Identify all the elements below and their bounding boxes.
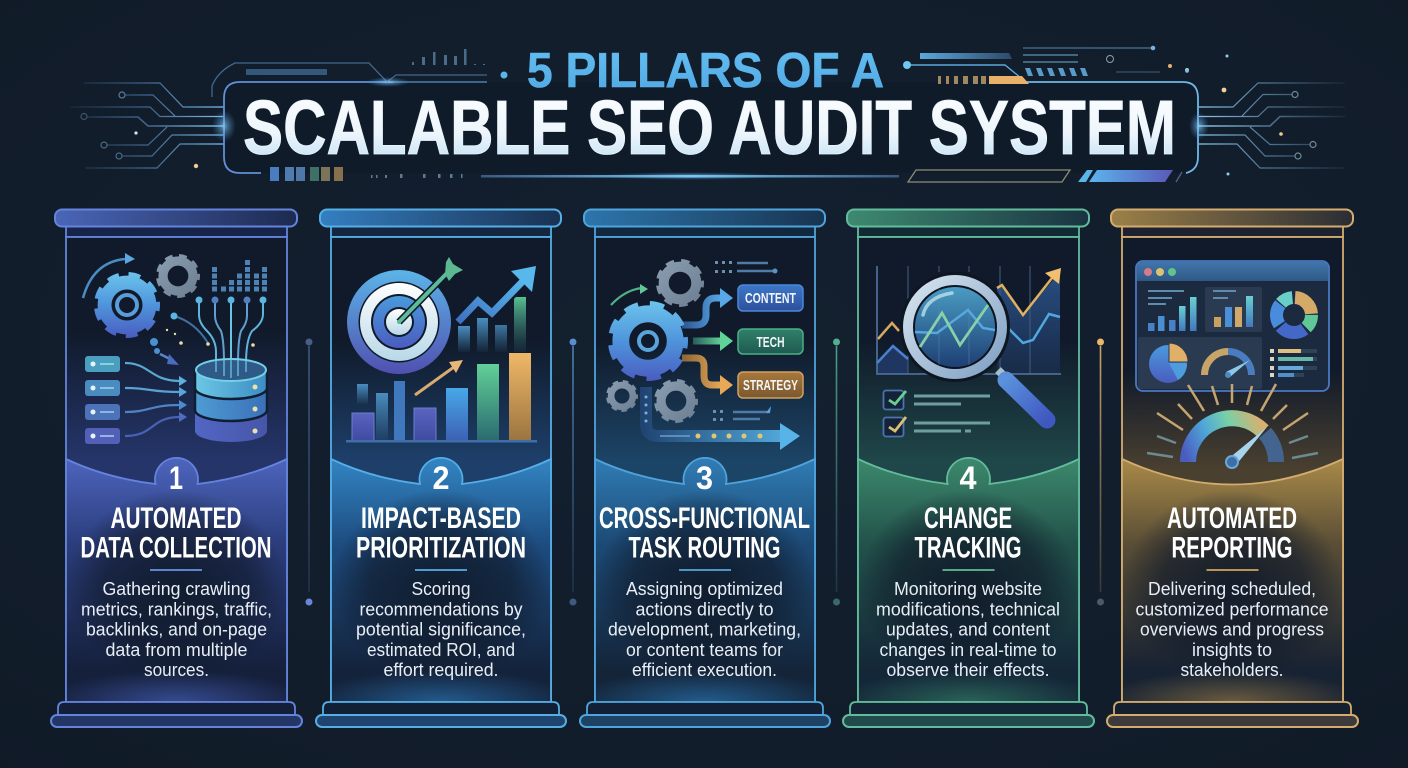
speedometer rays	[1147, 384, 1318, 458]
icon: dashboard and gauge	[1136, 261, 1329, 468]
pillar 1 frame	[51, 210, 302, 727]
pillar 5	[1107, 210, 1358, 727]
pillar 3 description: or content teams for	[626, 640, 783, 660]
pillar 1 heading	[80, 502, 272, 564]
pillar 4 heading	[914, 502, 1022, 564]
pillar 2	[316, 210, 566, 727]
pillar 1 heading: DATA COLLECTION	[80, 532, 272, 564]
pillar 3 heading: TASK ROUTING	[628, 532, 780, 564]
pillar 4 heading: CHANGE	[924, 502, 1012, 535]
pillar 4 description: changes in real-time to	[880, 640, 1056, 660]
pillar 5 description: customized performance	[1136, 599, 1328, 619]
pillar 1 description: sources.	[144, 660, 209, 680]
pillar 5 description: stakeholders.	[1180, 660, 1284, 680]
category chips	[738, 285, 803, 398]
pillar 3	[580, 210, 830, 727]
category chips: STRATEGY	[743, 377, 798, 394]
pillar 2 description: estimated ROI, and	[367, 640, 515, 660]
header decoration bottom	[270, 167, 1182, 182]
number badge 2: 2	[432, 460, 450, 496]
header decoration top right	[920, 46, 1189, 84]
pillar 5 heading: AUTOMATED	[1167, 502, 1297, 535]
title frame	[212, 61, 1209, 180]
pillar 1 heading: AUTOMATED	[110, 502, 242, 535]
number badge 4: 4	[960, 460, 977, 496]
pillar 4 heading: TRACKING	[914, 532, 1022, 564]
icon: data collection	[83, 253, 267, 444]
pillar 5 description	[1136, 579, 1328, 680]
icon: magnifier over chart	[877, 266, 1061, 436]
pillar 2 heading: PRIORITIZATION	[356, 532, 526, 564]
pillar 2 description: effort required.	[384, 660, 498, 680]
title line 1: 5 PILLARS OF A	[527, 44, 884, 98]
dashboard window	[1136, 261, 1329, 391]
pillar 1	[51, 210, 302, 727]
pillar 4	[843, 210, 1094, 727]
pillar 2 frame	[316, 210, 566, 727]
pillar 1 description: Gathering crawling	[102, 579, 250, 599]
connector line between pillars 2 and 3	[570, 338, 576, 606]
category chips: TECH	[756, 334, 784, 351]
pillar 3 description: development, marketing,	[608, 620, 801, 640]
pillar 2 heading: IMPACT-BASED	[361, 502, 521, 535]
pillar 1 description	[81, 579, 272, 680]
pillar 1 description: backlinks, and on-page	[86, 620, 267, 640]
pillar 3 heading: CROSS-FUNCTIONAL	[599, 502, 810, 535]
pillar 4 frame	[843, 210, 1094, 727]
category chips: CONTENT	[745, 290, 796, 307]
number badge 3: 3	[696, 460, 713, 496]
speedometer	[1188, 418, 1276, 468]
pillar 2 description: potential significance,	[356, 620, 526, 640]
pillar 3 description: actions directly to	[636, 599, 774, 619]
pillar 5 description: insights to	[1192, 640, 1272, 660]
number badge 1: 1	[169, 460, 183, 496]
pillar 4 description: updates, and content	[886, 620, 1050, 640]
pillar 5 heading: REPORTING	[1172, 532, 1292, 564]
pillar 2 description	[356, 579, 526, 680]
pillar 5 description: Delivering scheduled,	[1148, 579, 1316, 599]
pillar 3 description: efficient execution.	[632, 660, 777, 680]
pillar 4 description: Monitoring website	[894, 579, 1042, 599]
pillar 4 description: observe their effects.	[886, 660, 1050, 680]
right circuit traces	[1185, 54, 1345, 176]
pillar 5 description: overviews and progress	[1140, 620, 1324, 640]
pillar 1 description: metrics, rankings, traffic,	[81, 599, 272, 619]
pillar 3 frame	[580, 210, 830, 727]
pillar 1 description: data from multiple	[106, 640, 248, 660]
title line 2: SCALABLE SEO AUDIT SYSTEM	[243, 85, 1176, 171]
pillar 4 description	[876, 579, 1060, 680]
pillar 2 heading	[356, 502, 526, 564]
left circuit traces	[70, 83, 224, 168]
pillar 3 description	[608, 579, 801, 680]
header decoration top left	[246, 49, 485, 75]
icon: target and growth charts	[346, 257, 537, 442]
pillar 3 description: Assigning optimized	[626, 579, 783, 599]
pillar 3 heading	[599, 502, 810, 564]
connector line between pillars 4 and 5	[1097, 338, 1104, 606]
connector line between pillars 3 and 4	[833, 338, 840, 606]
pillar 2 description: Scoring	[412, 579, 470, 599]
pillar 2 description: recommendations by	[360, 599, 522, 619]
connector line between pillars 1 and 2	[306, 338, 312, 606]
pillar 5 heading	[1167, 502, 1297, 564]
pillar 4 description: modifications, technical	[876, 599, 1060, 619]
pillar 5 frame	[1107, 210, 1358, 727]
icon: task routing	[607, 261, 803, 450]
